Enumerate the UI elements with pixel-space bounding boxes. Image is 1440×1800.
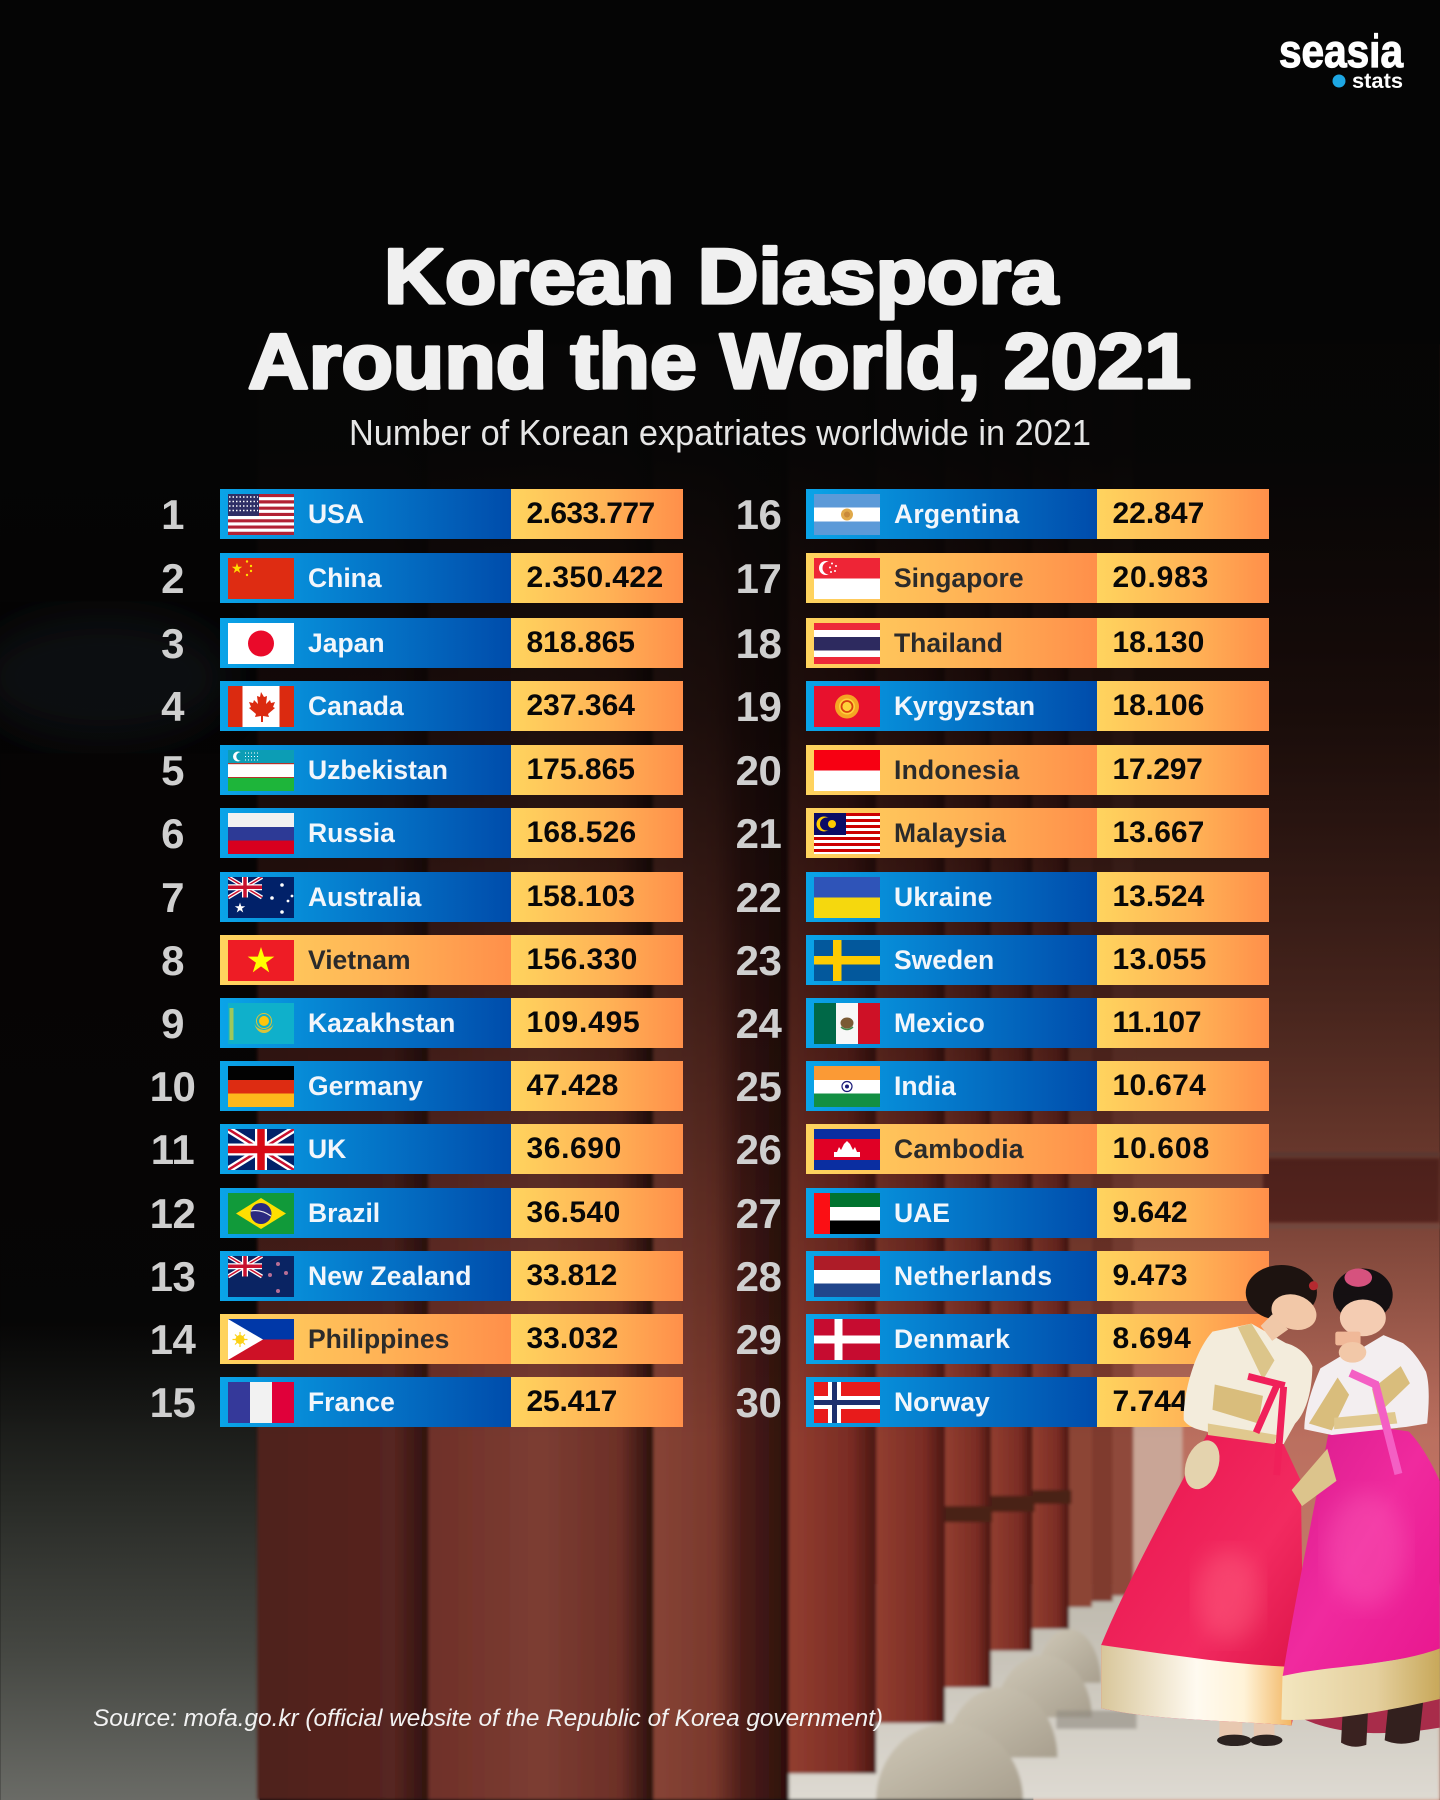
row 4: Canada: [161, 681, 683, 731]
name bar: UAE: [894, 1198, 950, 1228]
row 20: Indonesia: [736, 745, 1269, 795]
flag: Russia: [228, 813, 294, 854]
value: [1097, 998, 1269, 1048]
value: 36.690: [526, 1132, 622, 1165]
value: [511, 745, 683, 795]
rank: 9: [161, 1000, 184, 1047]
rank: 21: [736, 810, 781, 857]
value: [511, 998, 683, 1048]
value: 818.865: [526, 626, 635, 659]
value: 8.694: [1112, 1322, 1192, 1355]
name bar: [806, 998, 1097, 1048]
name bar: [220, 1124, 511, 1174]
value: [511, 489, 683, 539]
flag: Thailand: [814, 623, 880, 664]
rank: 29: [736, 1316, 781, 1363]
row 12: Brazil: [150, 1188, 683, 1238]
flag: Japan: [228, 623, 294, 664]
rank: 5: [161, 747, 184, 794]
rank: 22: [736, 874, 781, 921]
flag: UAE: [814, 1192, 880, 1234]
row 10: Germany: [150, 1061, 683, 1111]
row 1: USA: [161, 489, 683, 539]
rank: 6: [161, 810, 184, 857]
rank: 20: [736, 747, 781, 794]
flag: Norway: [814, 1382, 880, 1422]
name bar: France: [308, 1387, 395, 1417]
name bar: [806, 935, 1097, 985]
title: Around the World, 2021: [248, 317, 1191, 405]
rank: 24: [736, 1000, 781, 1047]
rank: 15: [150, 1379, 195, 1426]
name bar: Canada: [308, 691, 404, 721]
logo: seasia stats: stats: [1352, 70, 1403, 93]
flag: Kazakhstan: [228, 1003, 294, 1044]
value: [511, 1061, 683, 1111]
name bar: Kazakhstan: [308, 1008, 455, 1038]
name bar: [220, 808, 511, 858]
value: [1097, 489, 1269, 539]
name bar: [806, 1314, 1097, 1364]
name bar: [220, 681, 511, 731]
row 18: Thailand: [736, 618, 1269, 668]
row 8: Vietnam: [161, 935, 683, 985]
flag: USA: [228, 494, 294, 535]
value: [1097, 681, 1269, 731]
flag: Denmark: [814, 1318, 880, 1360]
name bar: Netherlands: [894, 1261, 1053, 1291]
name bar: Mexico: [894, 1008, 985, 1038]
rank: 1: [161, 491, 184, 538]
source note: Source: mofa.go.kr (official website of the Republic of Korea government): [93, 1705, 883, 1732]
row 2: China: [161, 553, 683, 603]
name bar: [806, 1377, 1097, 1427]
value: 20.983: [1112, 561, 1209, 594]
name bar: [220, 1314, 511, 1364]
name bar: USA: [308, 499, 364, 529]
row 16: Argentina: [736, 489, 1269, 539]
name bar: [806, 872, 1097, 922]
value: [511, 808, 683, 858]
name bar: Thailand: [894, 628, 1003, 658]
value: 47.428: [526, 1069, 618, 1102]
name bar: Malaysia: [894, 818, 1006, 848]
name bar: [220, 998, 511, 1048]
name bar: Kyrgyzstan: [894, 691, 1035, 721]
name bar: [220, 935, 511, 985]
row 11: UK: [151, 1124, 683, 1174]
value: [1097, 1061, 1269, 1111]
value: 237.364: [526, 689, 635, 722]
flag: Germany: [228, 1066, 294, 1107]
rank: 10: [150, 1063, 195, 1110]
flag: Mexico: [814, 1002, 880, 1044]
value: 2.633.777: [526, 497, 655, 530]
name bar: Indonesia: [894, 755, 1020, 785]
name bar: Brazil: [308, 1198, 380, 1228]
rank: 17: [736, 555, 781, 602]
flag: Brazil: [228, 1193, 294, 1234]
rank: 11: [151, 1126, 194, 1173]
flag: Indonesia: [814, 750, 880, 791]
row 30: Norway: [716, 1377, 1269, 1427]
name bar: [806, 489, 1097, 539]
rank: 2: [161, 555, 184, 602]
value: 9.473: [1112, 1259, 1188, 1292]
row 26: Cambodia: [716, 1124, 1269, 1174]
value: 33.812: [526, 1259, 617, 1292]
value: 10.608: [1112, 1132, 1210, 1165]
row 3: Japan: [161, 618, 683, 668]
flag: Ukraine: [814, 876, 880, 918]
value: 18.106: [1112, 689, 1204, 722]
name bar: Philippines: [308, 1324, 449, 1354]
value: 33.032: [526, 1322, 618, 1355]
rank: 30: [736, 1379, 781, 1426]
rank: 8: [161, 937, 184, 984]
row 21: Malaysia: [716, 808, 1269, 858]
name bar: Germany: [308, 1071, 423, 1101]
value: [1097, 1251, 1269, 1301]
value: [1097, 553, 1269, 603]
name bar: [220, 1061, 511, 1111]
value: [1097, 1314, 1269, 1364]
name bar: [806, 553, 1097, 603]
name bar: Uzbekistan: [308, 755, 448, 785]
name bar: Vietnam: [308, 945, 411, 975]
value: [511, 935, 683, 985]
value: [1097, 1377, 1269, 1427]
row 6: Russia: [161, 808, 683, 858]
flag: China: [228, 558, 294, 599]
name bar: UK: [308, 1134, 346, 1164]
name bar: [806, 681, 1097, 731]
row 23: Sweden: [716, 935, 1269, 985]
name bar: New Zealand: [308, 1261, 472, 1291]
flag: Cambodia: [814, 1128, 880, 1170]
rank: 3: [161, 620, 184, 667]
title: Korean Diaspora: [384, 232, 1059, 320]
value: [511, 553, 683, 603]
name bar: Australia: [308, 882, 421, 912]
value: [511, 681, 683, 731]
flag: Canada: [228, 686, 294, 727]
name bar: Sweden: [894, 945, 994, 975]
name bar: [806, 745, 1097, 795]
name bar: [220, 745, 511, 795]
value: 158.103: [526, 880, 635, 913]
row 13: New Zealand: [150, 1251, 683, 1301]
value: 18.130: [1112, 626, 1204, 659]
flag: Netherlands: [814, 1256, 880, 1296]
value: [511, 1188, 683, 1238]
value: 10.674: [1112, 1069, 1206, 1102]
row 5: Uzbekistan: [161, 745, 683, 795]
value: 109.495: [526, 1006, 641, 1039]
name bar: Argentina: [894, 499, 1019, 529]
rank: 23: [736, 937, 781, 984]
row 27: UAE: [716, 1188, 1269, 1238]
name bar: [806, 1188, 1097, 1238]
name bar: [220, 618, 511, 668]
row 15: France: [150, 1377, 683, 1427]
rank: 16: [736, 491, 781, 538]
row 7: Australia: [161, 872, 683, 922]
rank: 18: [736, 620, 781, 667]
row 22: Ukraine: [716, 872, 1269, 922]
value: 11.107: [1112, 1006, 1201, 1039]
flag: New Zealand: [228, 1256, 294, 1297]
flag: UK: [228, 1129, 294, 1170]
flag: Vietnam: [228, 940, 294, 981]
name bar: [220, 489, 511, 539]
name bar: [806, 1124, 1097, 1174]
right woman: [1281, 1268, 1440, 1747]
value: [1097, 745, 1269, 795]
row 9: Kazakhstan: [161, 998, 683, 1048]
value: 175.865: [526, 753, 635, 786]
flag: Kyrgyzstan: [814, 686, 880, 727]
row 25: India: [716, 1061, 1269, 1111]
name bar: China: [308, 563, 382, 593]
value: [511, 1314, 683, 1364]
value: [1097, 618, 1269, 668]
name bar: Singapore: [894, 563, 1024, 593]
rank: 26: [736, 1126, 781, 1173]
name bar: Norway: [894, 1387, 990, 1417]
value: 168.526: [526, 816, 636, 849]
flag: Uzbekistan: [228, 750, 294, 791]
value: 13.667: [1112, 816, 1204, 849]
rank: 12: [150, 1190, 195, 1237]
flag: Australia: [228, 877, 294, 918]
name bar: [220, 553, 511, 603]
value: [1097, 935, 1269, 985]
row 19: Kyrgyzstan: [736, 681, 1269, 731]
logo: seasia stats: seasia: [1279, 25, 1403, 77]
value: 7.744: [1112, 1385, 1188, 1418]
rank: 25: [736, 1063, 781, 1110]
name bar: [220, 872, 511, 922]
rank: 27: [736, 1190, 781, 1237]
name bar: [220, 1188, 511, 1238]
name bar: [220, 1251, 511, 1301]
value: 156.330: [526, 943, 638, 976]
value: 2.350.422: [526, 561, 664, 594]
left woman: [1101, 1265, 1321, 1746]
value: 13.524: [1112, 880, 1204, 913]
value: [1097, 808, 1269, 858]
value: [511, 1251, 683, 1301]
value: [1097, 1188, 1269, 1238]
name bar: [220, 1377, 511, 1427]
value: [511, 872, 683, 922]
row 29: Denmark: [716, 1314, 1269, 1364]
name bar: [806, 808, 1097, 858]
name bar: Cambodia: [894, 1134, 1024, 1164]
rank: 7: [161, 874, 184, 921]
flag: India: [814, 1066, 880, 1106]
flag: Singapore: [814, 558, 880, 599]
rank: 19: [736, 683, 781, 730]
rank: 28: [736, 1253, 781, 1300]
value: 17.297: [1112, 753, 1202, 786]
rank: 4: [161, 683, 184, 730]
name bar: Denmark: [894, 1324, 1010, 1354]
subtitle: Number of Korean expatriates worldwide in 2021: [349, 412, 1091, 453]
value: [511, 618, 683, 668]
name bar: Japan: [308, 628, 385, 658]
name bar: India: [894, 1071, 956, 1101]
name bar: Ukraine: [894, 882, 993, 912]
flag: Philippines: [228, 1319, 294, 1360]
flag: Malaysia: [814, 812, 880, 854]
row 28: Netherlands: [716, 1251, 1269, 1301]
value: [511, 1124, 683, 1174]
row 14: Philippines: [150, 1314, 683, 1364]
rank: 13: [150, 1253, 195, 1300]
name bar: [806, 1251, 1097, 1301]
value: 9.642: [1112, 1196, 1188, 1229]
name bar: [806, 1061, 1097, 1111]
flag: France: [228, 1382, 294, 1423]
row 17: Singapore: [736, 553, 1269, 603]
rank: 14: [150, 1316, 195, 1363]
value: [1097, 1124, 1269, 1174]
value: 13.055: [1112, 943, 1207, 976]
value: 36.540: [526, 1196, 621, 1229]
value: [1097, 872, 1269, 922]
value: 22.847: [1112, 497, 1204, 530]
value: [511, 1377, 683, 1427]
value: 25.417: [526, 1385, 617, 1418]
flag: Sweden: [814, 940, 880, 980]
flag: Argentina: [814, 494, 880, 535]
name bar: Russia: [308, 818, 395, 848]
row 24: Mexico: [716, 998, 1269, 1048]
name bar: [806, 618, 1097, 668]
